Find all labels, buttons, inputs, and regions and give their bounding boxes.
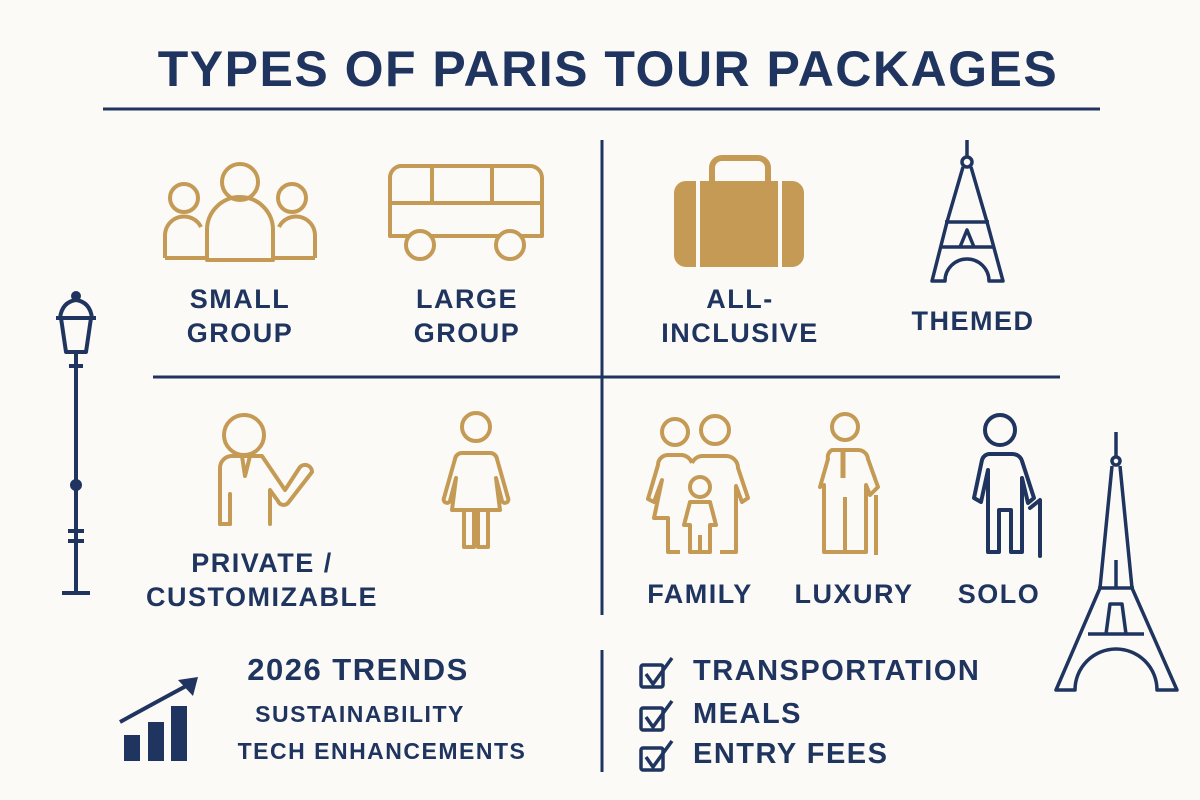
icon: growth chart <box>120 677 198 761</box>
panel: 2026 trends <box>120 652 526 764</box>
label: luxury: LUXURY <box>794 579 914 609</box>
panel: themed <box>912 140 1034 336</box>
icon: bus <box>390 166 542 259</box>
panel: large group <box>390 166 542 348</box>
panel: all-inclusive <box>661 158 819 348</box>
title: TYPES OF PARIS TOUR PACKAGES <box>158 41 1058 97</box>
icon: guide person <box>220 415 312 524</box>
text: trends heading: 2026 TRENDS <box>247 652 469 687</box>
icon: woman figure <box>444 413 508 547</box>
panel: all-inclusive: INCLUSIVE <box>661 318 819 348</box>
panel: private / customizable <box>146 415 378 612</box>
icon: small eiffel tower <box>932 140 1003 281</box>
icon: checkbox 2 <box>641 701 672 730</box>
icon: lamp post <box>56 293 96 593</box>
panel: small group: GROUP <box>187 318 293 348</box>
label: all-inclusive: ALL- <box>706 284 774 314</box>
panel: private / customizable: CUSTOMIZABLE <box>146 582 378 612</box>
panel: family / luxury / solo <box>647 414 1040 609</box>
text: trends list: TECH ENHANCEMENTS <box>238 738 526 764</box>
label: private / customizable: PRIVATE / <box>191 548 333 578</box>
text: trends list: SUSTAINABILITY <box>255 701 465 727</box>
panel: large group: GROUP <box>414 318 520 348</box>
icon: family <box>648 416 748 552</box>
label: themed: THEMED <box>912 306 1034 336</box>
icon: checkbox 3 <box>641 741 672 770</box>
text: trends list <box>238 701 526 764</box>
panel: inclusions checklist: MEALS <box>693 698 802 730</box>
icon: solo <box>974 415 1040 556</box>
panel: inclusions checklist: TRANSPORTATION <box>693 655 980 687</box>
icon: luxury <box>820 414 878 555</box>
icon: small group <box>165 164 315 260</box>
label: solo: SOLO <box>958 579 1040 609</box>
icon: large eiffel tower <box>1056 432 1177 690</box>
label: family: FAMILY <box>647 579 753 609</box>
panel: inclusions checklist: ENTRY FEES <box>693 738 888 770</box>
label: small group: SMALL <box>190 284 290 314</box>
label: large group: LARGE <box>416 284 518 314</box>
icon: suitcase <box>674 158 804 267</box>
panel: inclusions checklist <box>641 655 980 770</box>
icon: checkbox 1 <box>641 658 672 687</box>
panel: small group <box>165 164 315 348</box>
